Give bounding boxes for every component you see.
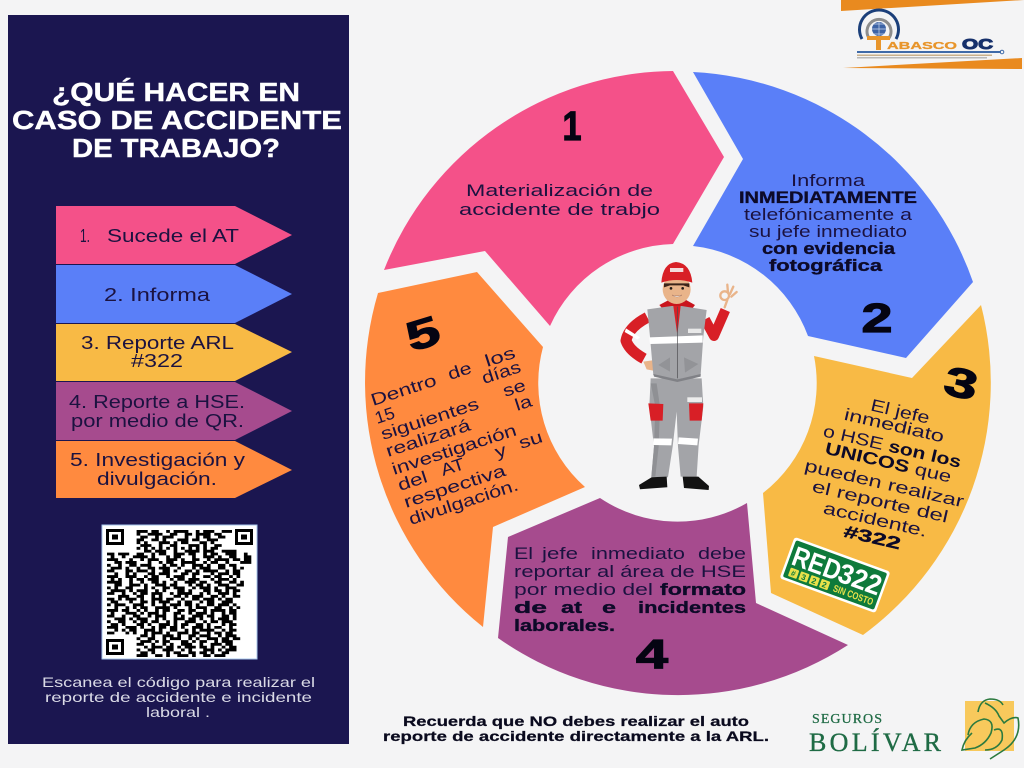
shoes xyxy=(639,477,709,490)
logo: Seguros Bolívar: BOLÍVAR xyxy=(809,728,942,757)
orange segment text: y xyxy=(492,440,509,462)
yellow segment text: accidente. xyxy=(821,498,929,541)
segment 3: yellow xyxy=(763,305,991,635)
left arm xyxy=(626,317,647,359)
orange segment text: realizará xyxy=(383,415,474,461)
orange segment text: AT xyxy=(438,454,467,480)
orange segment text: los xyxy=(482,343,518,371)
step arrow 3 xyxy=(56,324,292,381)
hands xyxy=(643,360,662,372)
QR caption: laboral . xyxy=(146,704,210,720)
segment 3: yellow: 3 xyxy=(940,357,982,409)
segment 2: blue: telefónicamente a xyxy=(744,205,913,224)
segment 4: purple: El xyxy=(514,544,533,563)
segment 4: purple: de xyxy=(514,598,547,617)
segment 4: purple: reportar al área de HSE xyxy=(514,562,746,581)
yellow segment text: #322 xyxy=(842,522,903,553)
yellow segment text: UNICOS que xyxy=(823,439,953,486)
orange segment text: de xyxy=(445,358,474,384)
step arrow 2: 2. Informa xyxy=(104,285,211,305)
yellow segment text: inmediato xyxy=(842,405,946,446)
segment 4: purple: incidentes xyxy=(638,598,746,617)
panel: left sidebar xyxy=(8,15,349,744)
illustration: worker giving OK sign xyxy=(625,262,737,490)
orange segment text: Dentro xyxy=(368,371,439,410)
yellow segment text: pueden realizar xyxy=(803,456,966,511)
segment 1: pink: accidente de trabjo xyxy=(459,200,660,219)
right arm xyxy=(705,310,725,336)
logo: Tabasco OC xyxy=(841,0,1024,69)
logo: Tabasco OC: OC xyxy=(962,36,993,53)
logo: Tabasco OC: ABASCO xyxy=(887,41,957,52)
segment 4: purple: laborales. xyxy=(514,616,615,635)
yellow segment text: el reporte del xyxy=(810,477,950,527)
step arrow 1: 1. xyxy=(80,226,90,246)
segment 5: orange xyxy=(365,272,585,627)
segment 4: purple xyxy=(498,498,848,695)
orange segment text: días xyxy=(479,357,523,388)
segment 4: purple: e xyxy=(602,598,616,617)
segment 2: blue: fotográfica xyxy=(769,256,883,275)
segment 2: blue xyxy=(693,72,973,358)
segment 1: pink: Materialización de xyxy=(466,181,653,200)
chart: process cycle ring xyxy=(365,71,991,695)
step arrow 4 xyxy=(56,382,292,440)
segment 4: purple: inmediato xyxy=(591,544,685,563)
orange segment text: la xyxy=(512,391,535,415)
orange segment text: del xyxy=(395,467,430,495)
badge: RED 322 sin costo: 3 xyxy=(800,572,808,583)
segment 5: orange: 5 xyxy=(400,307,445,360)
step arrow 5 xyxy=(56,441,292,498)
note: reminder about ARL report: reporte de accidente directamente a la ARL. xyxy=(383,728,769,744)
step arrow 1 xyxy=(56,206,292,264)
orange segment text: respectiva xyxy=(401,461,509,512)
hood collar xyxy=(659,299,695,312)
orange segment text: divulgación. xyxy=(406,476,521,529)
segment 4: purple: 4 xyxy=(636,631,668,677)
segment 4: purple: por medio del xyxy=(514,580,653,599)
badge: RED 322 sin costo: 2 xyxy=(821,580,828,590)
QR code xyxy=(102,525,257,659)
title: DE TRABAJO? xyxy=(72,133,280,163)
note: reminder about ARL report: Recuerda que NO debes realizar el auto xyxy=(403,713,749,729)
step arrow 3: 3. Reporte ARL xyxy=(81,333,234,353)
badge: RED 322 sin costo: 322 xyxy=(834,557,886,601)
badge: RED 322 sin costo: SIN COSTO xyxy=(831,584,875,608)
orange segment text xyxy=(368,343,545,529)
step arrow 2 xyxy=(56,265,292,323)
segment 2: blue: INMEDIATAMENTE xyxy=(739,188,917,207)
segment 1: pink xyxy=(384,71,724,326)
yellow segment text: o HSE son los xyxy=(821,422,963,472)
segment 2: blue: 2 xyxy=(862,295,892,341)
badge: RED 322 sin costo: RED xyxy=(788,540,846,587)
trousers xyxy=(649,378,703,477)
step arrow 3: #322 xyxy=(131,351,183,371)
QR caption xyxy=(42,674,315,720)
title: ¿QUÉ HACER EN xyxy=(52,77,300,107)
segment 4: purple: formato xyxy=(660,580,746,599)
orange segment text: 15 xyxy=(372,404,397,428)
orange segment text: se xyxy=(500,376,528,401)
orange segment text: siguientes xyxy=(378,394,481,444)
logo: Seguros Bolívar: SEGUROS xyxy=(812,712,882,727)
segment 2: blue: Informa xyxy=(791,171,866,190)
yellow segment text xyxy=(803,396,966,553)
step arrow 4: 4. Reporte a HSE. xyxy=(69,392,245,412)
QR caption: Escanea el código para realizar el xyxy=(42,674,315,690)
segment 1: pink: 1 xyxy=(562,103,582,149)
logo: Seguros Bolívar xyxy=(809,699,1019,759)
segment 2: blue: con evidencia xyxy=(762,239,896,258)
head xyxy=(663,275,691,304)
segment 4: purple: jefe xyxy=(541,544,578,563)
badge: RED 322 sin costo: 2 xyxy=(810,576,818,586)
note: reminder about ARL report xyxy=(383,713,769,744)
title: CASO DE ACCIDENTE xyxy=(12,105,342,135)
red pockets xyxy=(648,403,703,421)
segment 2: blue: su jefe inmediato xyxy=(749,222,907,241)
cap xyxy=(661,262,692,283)
badge: RED 322 sin costo xyxy=(780,537,890,613)
step arrow 1: Sucede el AT xyxy=(107,226,239,246)
step arrow 5: divulgación. xyxy=(97,469,217,489)
vest xyxy=(647,306,707,379)
reflective bands on trousers xyxy=(653,437,698,445)
step arrow 5: 5. Investigación y xyxy=(70,450,245,470)
orange segment text: investigación xyxy=(389,421,519,479)
orange segment text: su xyxy=(516,427,545,453)
step arrow 4: por medio de QR. xyxy=(71,411,244,431)
title xyxy=(12,77,342,163)
QR caption: reporte de accidente e incidente xyxy=(45,689,312,705)
badge: RED 322 sin costo: # xyxy=(790,569,797,579)
yellow segment text: El jefe xyxy=(869,396,932,428)
segment 4: purple: at xyxy=(561,598,582,617)
segment 4: purple: debe xyxy=(698,544,746,563)
